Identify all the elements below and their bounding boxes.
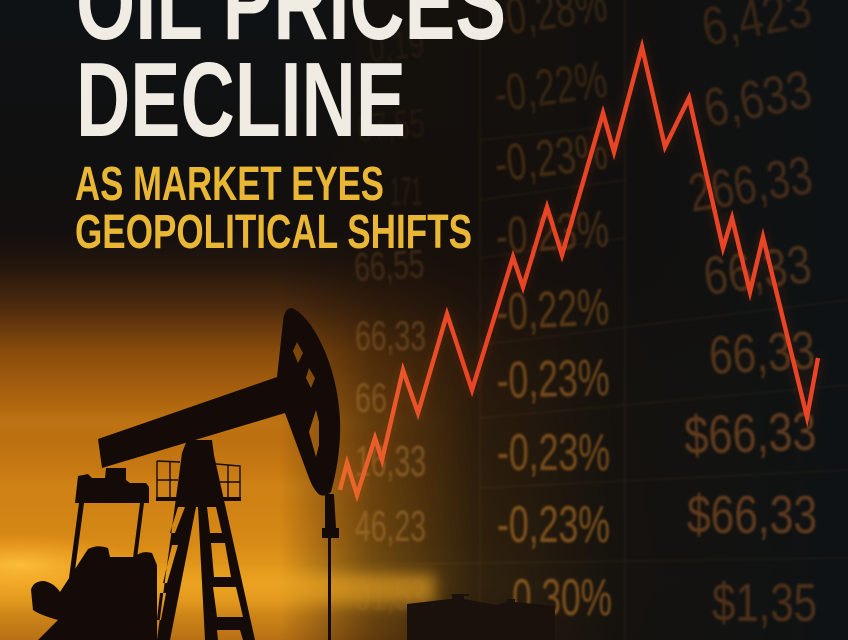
price line chart — [340, 47, 818, 495]
column 1 values — [353, 21, 427, 620]
pump jack silhouette — [31, 308, 340, 640]
storage tanks silhouette — [407, 594, 555, 640]
column 3 prices: $1,35 — [712, 573, 817, 633]
headline: Oil Prices Decline: DECLINE — [76, 41, 406, 159]
column 3 prices: 6,633 — [699, 59, 816, 139]
column 1 values: 67,55 — [355, 101, 427, 151]
table grid lines — [340, 0, 848, 640]
column 2 percent changes: -0,22% — [495, 278, 610, 342]
work platform railing — [157, 461, 240, 499]
column 2 percent changes: -0,23% — [497, 496, 610, 554]
column 2 percent changes: -0,23% — [491, 123, 611, 194]
column 1 values: 46,23 — [355, 502, 426, 551]
column 1 values: 0,19 — [366, 21, 427, 71]
market data table — [340, 0, 848, 640]
column 2 percent changes: -0,23% — [497, 424, 610, 482]
column 3 prices: 66,33 — [700, 234, 815, 307]
column 1 values: 66,33 — [355, 312, 426, 359]
subheading: as market eyes geopolitical shifts: AS MARKET EYES — [75, 158, 384, 211]
walking beam and horsehead — [98, 308, 340, 496]
crank and counterweight — [31, 546, 157, 640]
column 1 values: 16,33 — [355, 437, 426, 486]
column 3 prices — [683, 0, 817, 633]
subheading: as market eyes geopolitical shifts: GEOPOLITICAL SHIFTS — [75, 206, 472, 259]
column 1 values: 66 — [355, 374, 387, 421]
column 2 percent changes: -0,23% — [494, 200, 611, 266]
headline: Oil Prices Decline — [76, 0, 506, 159]
samson post A-frame with rungs — [157, 440, 255, 640]
polished rod and clamp — [322, 494, 339, 640]
column 2 percent changes: 0,30% — [512, 569, 612, 627]
column 1 values: 171 — [390, 170, 422, 214]
column 2 percent changes — [491, 0, 612, 627]
column 1 values: 66,55 — [353, 242, 425, 290]
column 2 percent changes: -0,23% — [496, 349, 610, 410]
column 2 percent changes: -0,22% — [491, 51, 611, 124]
column 3 prices: 66,33 — [707, 321, 816, 386]
column 1 values: 91,53 — [355, 571, 426, 620]
subheading: as market eyes geopolitical shifts — [75, 158, 472, 259]
equalizer and pitman arms — [69, 468, 149, 578]
column 3 prices: $66,33 — [683, 401, 817, 466]
column 3 prices: $66,33 — [687, 485, 817, 545]
